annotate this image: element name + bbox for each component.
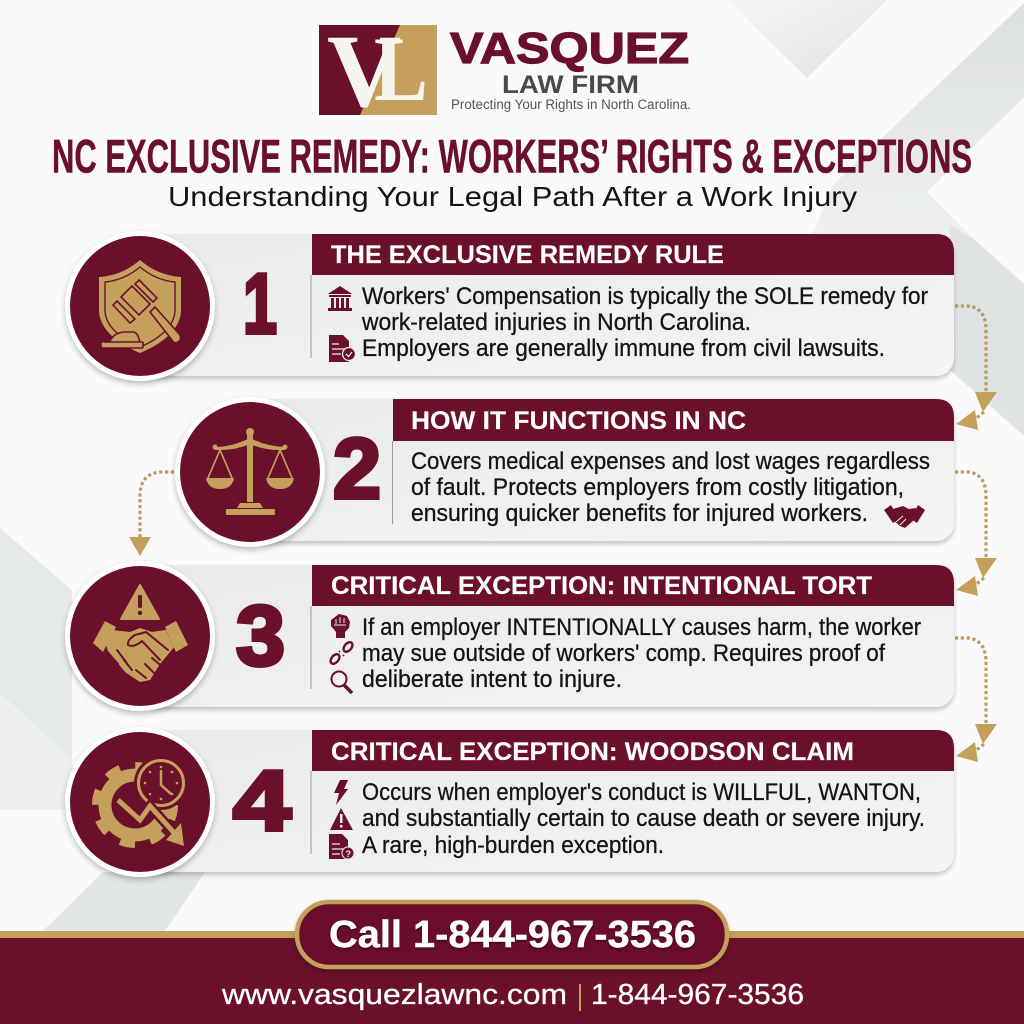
heading: CRITICAL EXCEPTION: INTENTIONAL TORT [331, 572, 872, 600]
body text: deliberate intent to injure. [362, 666, 622, 693]
panel: step 3 [65, 561, 954, 711]
icon: magnifier [332, 672, 352, 693]
number 3: 3 [236, 589, 285, 684]
body text: may sue outside of workers' comp. Requires proof of [362, 640, 885, 667]
panel: step 2 [175, 397, 954, 547]
subtitle: Understanding Your Legal Path After a Work Injury [168, 181, 857, 212]
arrow: card 1 to card 2 [955, 306, 997, 430]
body text: of fault. Protects employers from costly litigation, [411, 474, 904, 501]
icon: courthouse [328, 286, 352, 311]
icon: warning triangle [330, 808, 353, 830]
number 2: 2 [333, 422, 381, 517]
icon: broken chain [329, 641, 354, 665]
body text: ensuring quicker benefits for injured workers. [411, 500, 868, 527]
body text: Occurs when employer's conduct is WILLFUL, WANTON, [362, 779, 921, 806]
law firm: LAW FIRM [502, 71, 639, 99]
heading: HOW IT FUNCTIONS IN NC [411, 407, 746, 435]
body text: If an employer INTENTIONALLY causes harm, the worker [362, 614, 921, 641]
website and phone: www.vasquezlawnc.com [221, 979, 567, 1011]
icon circle: shield and gavel [65, 231, 215, 381]
tagline: Protecting Your Rights in North Carolina. [451, 97, 691, 112]
arrow: card 3 to card 4 [955, 638, 997, 762]
icon circle: scales of justice [175, 397, 325, 547]
body text: Covers medical expenses and lost wages regardless [411, 448, 930, 475]
body text: A rare, high-burden exception. [362, 832, 664, 859]
card header [312, 565, 954, 606]
heading: CRITICAL EXCEPTION: WOODSON CLAIM [331, 738, 854, 766]
website and phone [221, 979, 804, 1011]
card body [140, 565, 954, 707]
panel: step 4 [65, 727, 954, 877]
body text: Employers are generally immune from civil lawsuits. [362, 335, 885, 362]
call button [297, 902, 727, 967]
icon: document question [329, 834, 354, 859]
card header [312, 234, 954, 275]
icon: lightning bolt [334, 780, 348, 805]
logo mark: V [327, 14, 401, 129]
logo mark: L [374, 18, 428, 120]
arrow: card 2 to card 3 [955, 472, 997, 596]
card body [140, 730, 954, 872]
number 1: 1 [243, 257, 277, 352]
icon: small handshake [884, 505, 925, 528]
number 4: 4 [233, 754, 291, 849]
icon: document check [329, 335, 356, 362]
card body [140, 234, 954, 376]
body text: and substantially certain to cause death or severe injury. [362, 805, 925, 832]
body text [411, 448, 930, 527]
body text: Workers' Compensation is typically the SOLE remedy for [362, 283, 928, 310]
firm name: VASQUEZ [450, 24, 689, 73]
card header [393, 399, 954, 441]
body text [362, 614, 921, 693]
logo [319, 14, 691, 129]
card header [312, 730, 954, 771]
logo mark [319, 14, 437, 129]
arrow: circle 2 to step 3 [129, 472, 174, 556]
panel: step 1 [65, 231, 954, 381]
website and phone: 1-844-967-3536 [591, 979, 804, 1011]
call button: Call 1-844-967-3536 [329, 914, 696, 956]
footer band [0, 931, 1024, 1024]
body text: work-related injuries in North Carolina. [361, 309, 751, 336]
body text [362, 779, 925, 859]
icon circle: gear, clock and falling arrow [65, 727, 215, 877]
icon: raised fist [331, 614, 350, 638]
heading: THE EXCLUSIVE REMEDY RULE [331, 241, 724, 269]
card body [250, 399, 954, 541]
body text [361, 283, 928, 362]
icon: document question: ? [346, 849, 351, 859]
icon circle: warning and handshake [65, 561, 215, 711]
